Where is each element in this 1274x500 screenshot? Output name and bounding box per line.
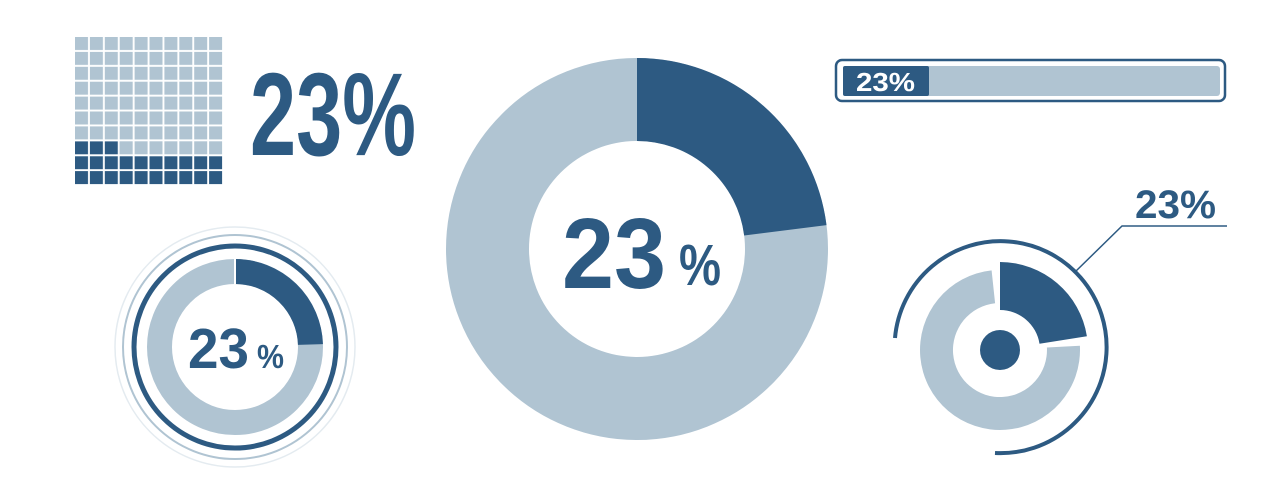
ringed donut label <box>188 317 284 381</box>
big donut chart <box>488 100 786 398</box>
big donut label: 23 <box>562 198 666 310</box>
progress bar <box>836 60 1225 101</box>
ringed donut chart <box>115 227 355 467</box>
exploded donut chart <box>895 183 1227 453</box>
waffle chart <box>75 37 224 186</box>
waffle label: 23% <box>250 49 416 181</box>
big donut label <box>562 198 721 310</box>
bar label: 23% <box>856 67 915 97</box>
leader line <box>1075 226 1227 272</box>
ringed donut label: % <box>257 338 284 375</box>
exploded donut label: 23% <box>1135 183 1216 227</box>
ringed donut label: 23 <box>188 317 249 381</box>
big donut label: % <box>679 233 721 298</box>
